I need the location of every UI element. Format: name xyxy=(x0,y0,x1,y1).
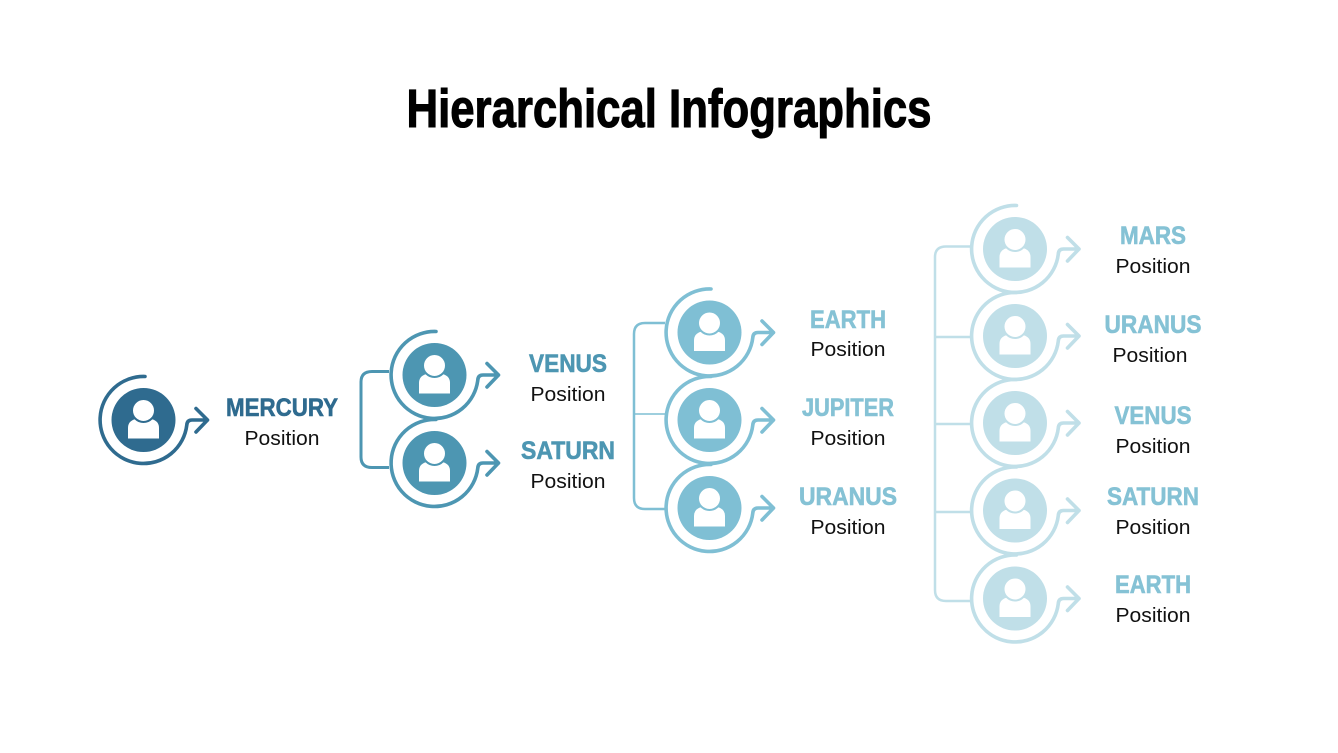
icon: person Earth xyxy=(972,555,1079,642)
node: Uranus level 4 xyxy=(972,292,1202,379)
label: Uranus: URANUS xyxy=(799,483,897,511)
text: Venus position: Position xyxy=(530,384,606,406)
icon: person Venus xyxy=(391,331,498,418)
text: Earth position: Position xyxy=(810,339,886,361)
label: Venus: VENUS xyxy=(1114,402,1192,430)
icon: person Saturn xyxy=(391,419,498,506)
node: Saturn xyxy=(391,419,615,506)
label: Uranus: URANUS xyxy=(1104,311,1202,339)
text: Mars position: Position xyxy=(1116,256,1190,278)
label: Earth: EARTH xyxy=(810,306,886,334)
text: Jupiter position: Position xyxy=(810,428,886,450)
icon: person Earth xyxy=(666,289,774,376)
icon: person Jupiter xyxy=(666,376,774,463)
icon: person Mars xyxy=(972,205,1079,292)
node: Mars xyxy=(972,205,1190,292)
connector: level 2 xyxy=(361,372,389,468)
node: Saturn level 4 xyxy=(972,467,1199,554)
label: Saturn: SATURN xyxy=(1107,483,1199,511)
title: Hierarchical Infographics xyxy=(406,79,932,139)
icon: person Mercury xyxy=(100,376,208,463)
label: Venus: VENUS xyxy=(529,350,607,378)
label: Jupiter: JUPITER xyxy=(802,394,894,422)
node: Venus xyxy=(391,331,607,418)
text: Uranus position: Position xyxy=(1112,345,1188,367)
connector: level 3 xyxy=(634,323,665,509)
icon: person Saturn xyxy=(972,467,1079,554)
text: Uranus position: Position xyxy=(810,517,886,539)
connector: level 3 middle stub xyxy=(634,413,665,415)
connector: level 4 xyxy=(935,246,971,601)
label: Mercury: MERCURY xyxy=(226,394,338,422)
icon: person Uranus xyxy=(972,292,1079,379)
label: Earth: EARTH xyxy=(1115,571,1191,599)
text: Venus position: Position xyxy=(1116,436,1190,458)
label: Mars: MARS xyxy=(1120,222,1186,250)
icon: person Venus xyxy=(972,379,1079,466)
text: Mercury position: Position xyxy=(244,428,320,450)
node: Uranus level 3 xyxy=(666,464,897,551)
node: Venus level 4 xyxy=(972,379,1192,466)
text: Saturn position: Position xyxy=(530,471,606,493)
icon: person Uranus xyxy=(666,464,774,551)
text: Earth position: Position xyxy=(1116,605,1190,627)
node: Earth level 4 xyxy=(972,555,1191,642)
node: Earth level 3 xyxy=(666,289,886,376)
node: Mercury xyxy=(100,376,338,463)
label: Saturn: SATURN xyxy=(521,437,615,465)
text: Saturn position: Position xyxy=(1116,517,1190,539)
node: Jupiter xyxy=(666,376,894,463)
